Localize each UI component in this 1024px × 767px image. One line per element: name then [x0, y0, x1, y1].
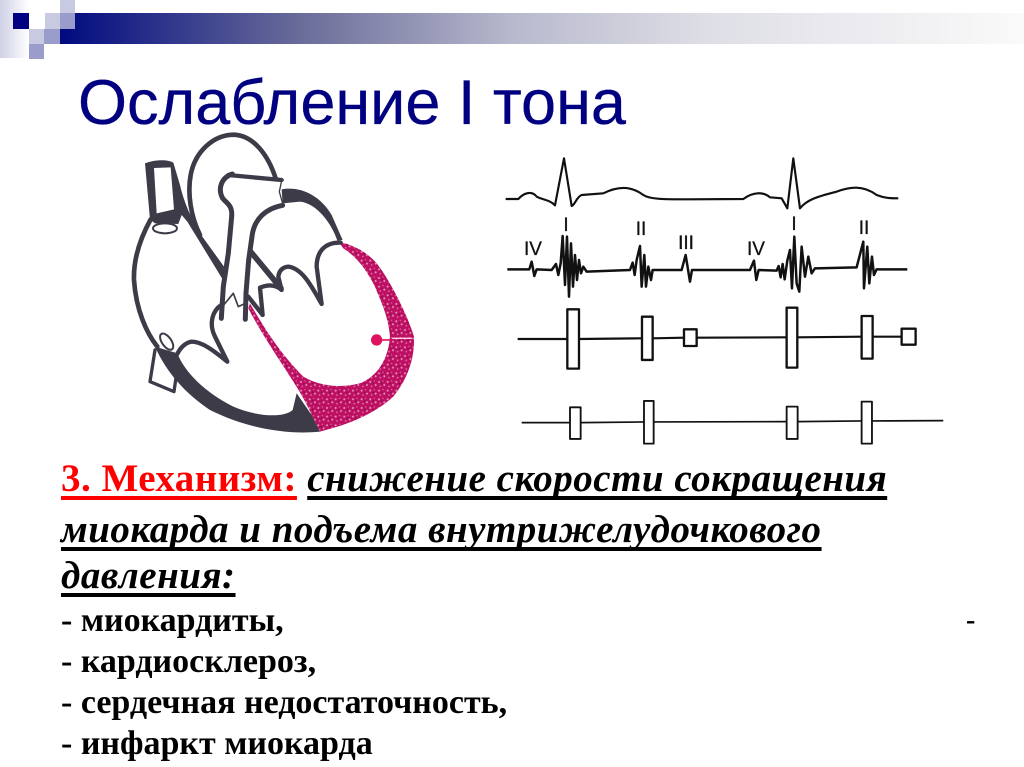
sound diagram one — [518, 337, 902, 339]
tone labels: III — [678, 233, 694, 254]
myocardium wall — [248, 242, 414, 432]
mechanism line one: 3. Механизм: снижение скорости сокращения — [61, 457, 887, 500]
list item: - кардиосклероз, — [61, 643, 316, 680]
list item: - сердечная недостаточность, — [61, 684, 507, 721]
text block: mechanism — [60, 457, 975, 762]
aorta right edge — [279, 181, 283, 203]
stray dash: - — [966, 605, 975, 636]
tone labels: II — [859, 218, 869, 239]
tone labels: IV — [747, 239, 765, 260]
heart diagram and sound traces — [132, 132, 944, 444]
tone labels: I — [563, 215, 569, 236]
pulmonary trunk and left atrium — [245, 205, 283, 319]
mechanism line two: миокарда и подъема внутрижелудочкового — [61, 508, 822, 551]
inferior vena cava — [150, 350, 177, 392]
right atrium outline — [134, 219, 157, 347]
sound diagram two — [522, 421, 943, 423]
mitral valve leaflets — [248, 243, 341, 315]
tone labels: I — [791, 214, 797, 235]
tone labels: II — [636, 219, 646, 240]
phonocardiogram trace — [507, 236, 907, 297]
superior vena cava — [145, 160, 224, 279]
decorative header squares and bar — [0, 0, 990, 59]
list item: - инфаркт миокарда — [61, 725, 373, 762]
electrode marker — [371, 334, 412, 346]
list item: - миокардиты, — [61, 602, 284, 639]
aorta arch — [189, 135, 276, 235]
lower dark wall — [155, 347, 320, 432]
ecg trace — [506, 158, 898, 208]
title: Ослабление I тона — [78, 68, 626, 138]
tricuspid valve leaflets — [177, 305, 227, 362]
tone labels: IV — [524, 239, 542, 260]
mechanism line three: давления: — [61, 554, 236, 597]
valve ovals — [153, 223, 177, 233]
phonocardiogram traces — [506, 158, 943, 444]
tone labels — [524, 214, 869, 260]
